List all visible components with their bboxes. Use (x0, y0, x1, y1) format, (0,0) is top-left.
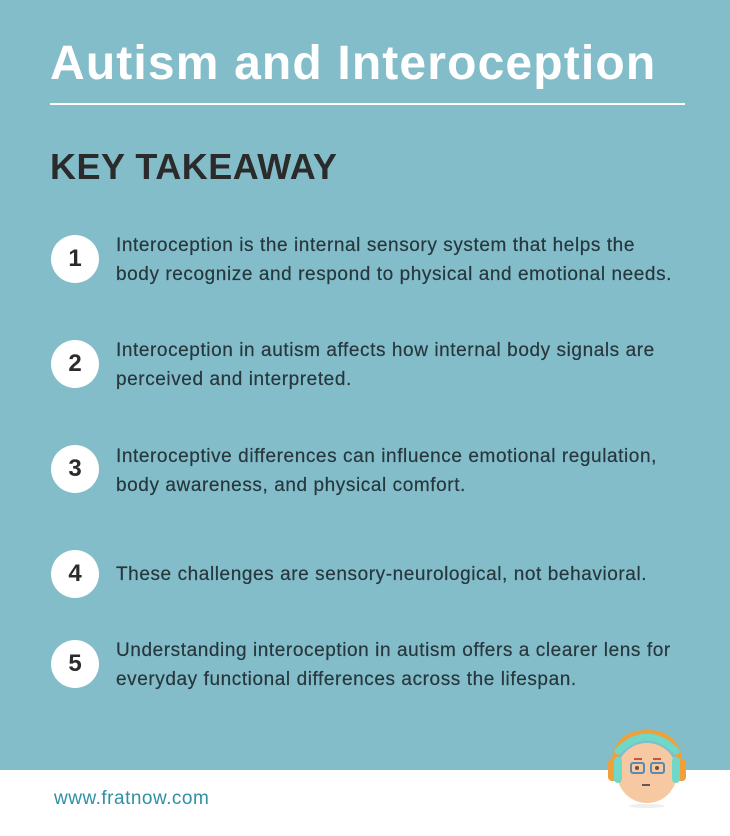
item 1: Interoception is the internal sensory system that helps the (116, 235, 635, 256)
item 3: 3 (68, 455, 82, 482)
title: Autism and Interoception (50, 37, 656, 90)
item 3: body awareness, and physical comfort. (116, 475, 466, 496)
item 2: perceived and interpreted. (116, 369, 352, 390)
item 5: everyday functional differences across the lifespan. (116, 669, 577, 690)
item 1: body recognize and respond to physical and emotional needs. (116, 264, 672, 285)
item 2 (51, 340, 655, 390)
item 5: 5 (68, 650, 82, 677)
item 4: These challenges are sensory-neurological, not behavioral. (116, 564, 647, 585)
item 2: Interoception in autism affects how internal body signals are (116, 340, 655, 361)
item 1: 1 (68, 245, 82, 272)
item 5: Understanding interoception in autism offers a clearer lens for (116, 640, 671, 661)
item 5 (51, 640, 671, 690)
item 3 (51, 445, 657, 496)
item 3: Interoceptive differences can influence emotional regulation, (116, 446, 657, 467)
item 4: 4 (68, 560, 82, 587)
heading: key takeaway: KEY TAKEAWAY (50, 146, 337, 187)
item 2: 2 (68, 350, 82, 377)
footer url: www.fratnow.com (54, 788, 209, 809)
icon: mascot with headphones (608, 730, 686, 808)
item 1 (51, 235, 672, 285)
item 4 (51, 550, 647, 598)
